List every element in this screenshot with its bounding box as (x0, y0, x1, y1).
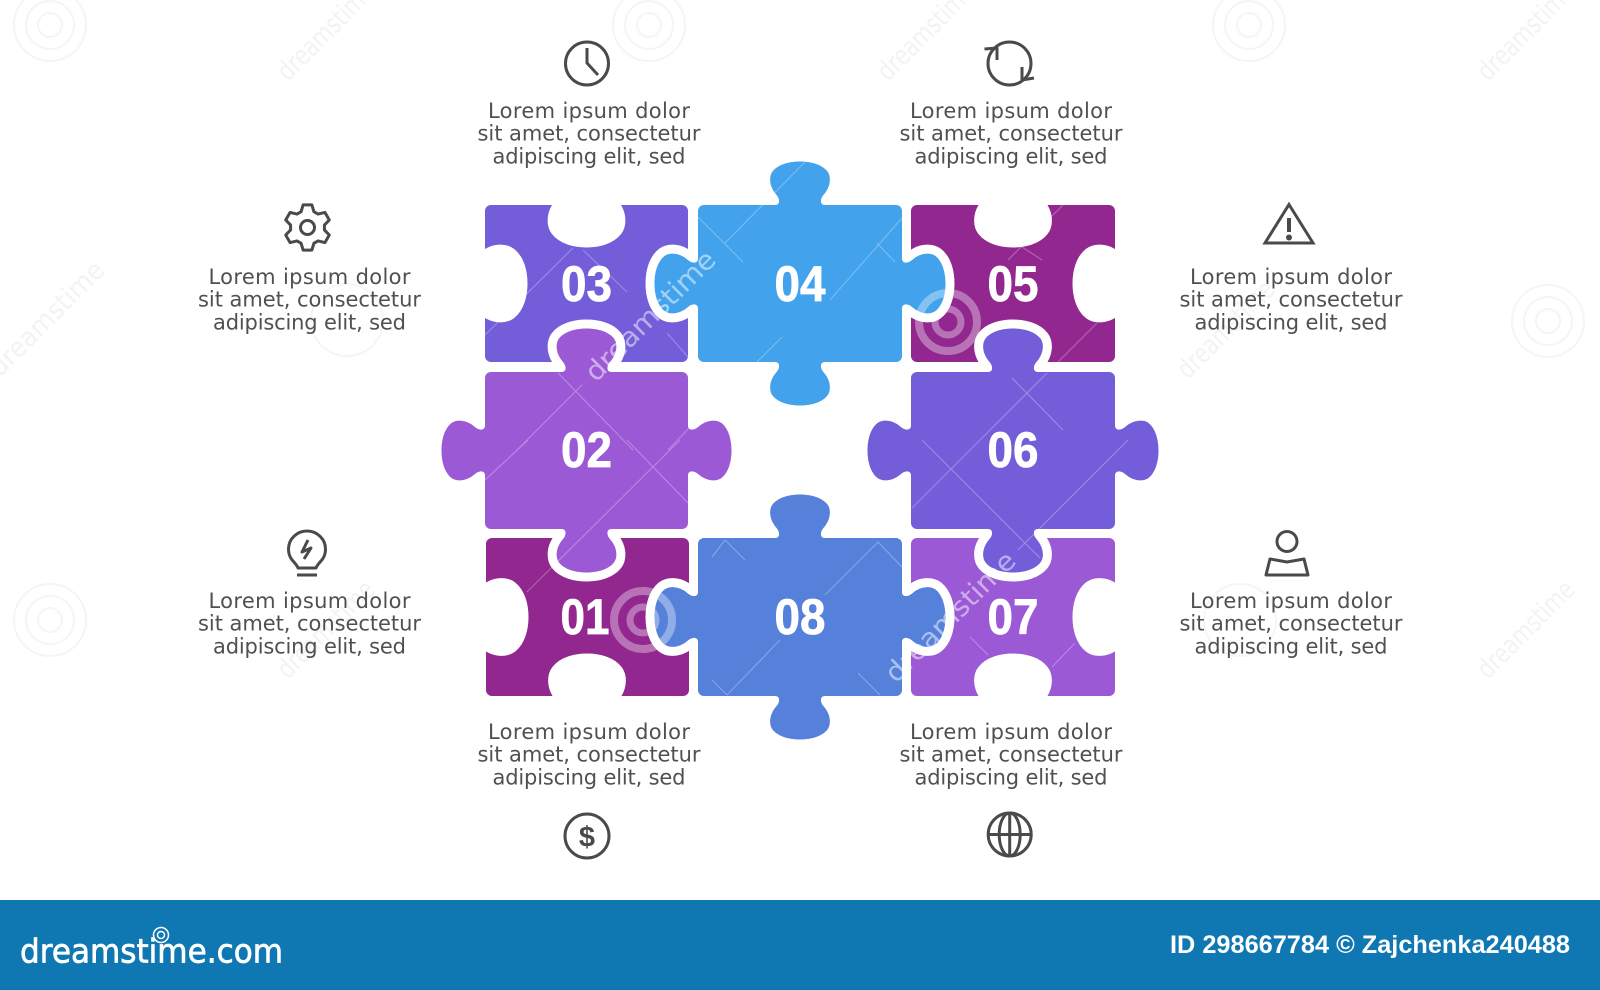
piece 06: 06 (988, 422, 1038, 478)
piece 01 (475, 538, 689, 707)
text block: top left (478, 99, 701, 168)
watermark overlay on the puzzle (485, 162, 1128, 695)
text block: upper left (198, 265, 421, 334)
text block: upper left: Lorem ipsum dolor (208, 265, 411, 289)
piece 05 (911, 194, 1126, 362)
faint background watermark (0, 0, 1584, 685)
watermark overlay on the puzzle: dreamstime (579, 244, 723, 388)
footer bar (0, 900, 1600, 990)
footer credit: ID 298667784 © Zajchenka240488 (1170, 931, 1570, 959)
text block: upper right (1180, 265, 1403, 334)
text block: top right: Lorem ipsum dolor (910, 99, 1112, 123)
piece 04: 04 (774, 256, 826, 312)
icon: clock (566, 42, 608, 85)
icon: warning triangle (1265, 204, 1313, 243)
piece 08 (654, 494, 946, 740)
piece 02: 02 (561, 422, 612, 478)
text block: lower left: Lorem ipsum dolor (208, 589, 411, 613)
piece 06 (868, 328, 1158, 572)
icon: light bulb (288, 531, 326, 575)
text block: lower right: Lorem ipsum dolor (1190, 589, 1392, 613)
text block: upper right: adipiscing elit, sed (1194, 310, 1388, 334)
icon: globe (988, 813, 1031, 856)
faint background watermark: dreamstime (271, 575, 381, 685)
text block: lower right: adipiscing elit, sed (1194, 634, 1388, 658)
footer logo: dreamstime.com: dreamstime.com (20, 932, 283, 970)
text block: upper left: sit amet, consectetur (198, 288, 421, 312)
text block: lower left: adipiscing elit, sed (213, 634, 406, 658)
piece 02 (442, 328, 732, 572)
text block: bottom right: adipiscing elit, sed (914, 766, 1108, 790)
text block: upper right: sit amet, consectetur (1180, 288, 1403, 312)
text block: top left: sit amet, consectetur (478, 122, 701, 146)
text block: top right (900, 99, 1123, 168)
piece 07 (911, 538, 1126, 707)
icon: dollar coin (565, 814, 609, 858)
icon: dollar coin: $ (579, 822, 595, 854)
piece 03: 03 (561, 256, 612, 312)
piece 05: 05 (988, 256, 1038, 312)
text block: upper left: adipiscing elit, sed (213, 310, 406, 334)
icon: person (1266, 532, 1308, 575)
text block: top left: adipiscing elit, sed (492, 144, 686, 168)
faint background watermark: dreamstime (1171, 275, 1281, 385)
text block: top right: sit amet, consectetur (900, 122, 1123, 146)
text block: top left: Lorem ipsum dolor (488, 99, 690, 123)
text block: lower right (1180, 589, 1403, 658)
icon: gear (286, 205, 329, 250)
text block: lower left: sit amet, consectetur (198, 612, 421, 636)
text block: bottom right (900, 720, 1123, 790)
text block: lower left (198, 589, 421, 658)
piece 01: 01 (560, 589, 610, 645)
text block: upper right: Lorem ipsum dolor (1190, 265, 1392, 289)
watermark overlay on the puzzle: dreamstime (879, 545, 1023, 689)
text block: bottom left: Lorem ipsum dolor (488, 720, 690, 744)
icon: cycle arrows (984, 42, 1034, 85)
text block: bottom right: sit amet, consectetur (900, 742, 1123, 766)
text block: bottom left (478, 720, 701, 790)
text block: bottom right: Lorem ipsum dolor (910, 720, 1112, 744)
text block: bottom left: sit amet, consectetur (478, 742, 701, 766)
piece 04 (654, 162, 946, 406)
piece 08: 08 (774, 589, 826, 645)
text block: bottom left: adipiscing elit, sed (492, 766, 686, 790)
text block: lower right: sit amet, consectetur (1180, 612, 1403, 636)
piece 07: 07 (988, 589, 1038, 645)
piece 03 (474, 194, 688, 362)
text block: top right: adipiscing elit, sed (914, 144, 1108, 168)
